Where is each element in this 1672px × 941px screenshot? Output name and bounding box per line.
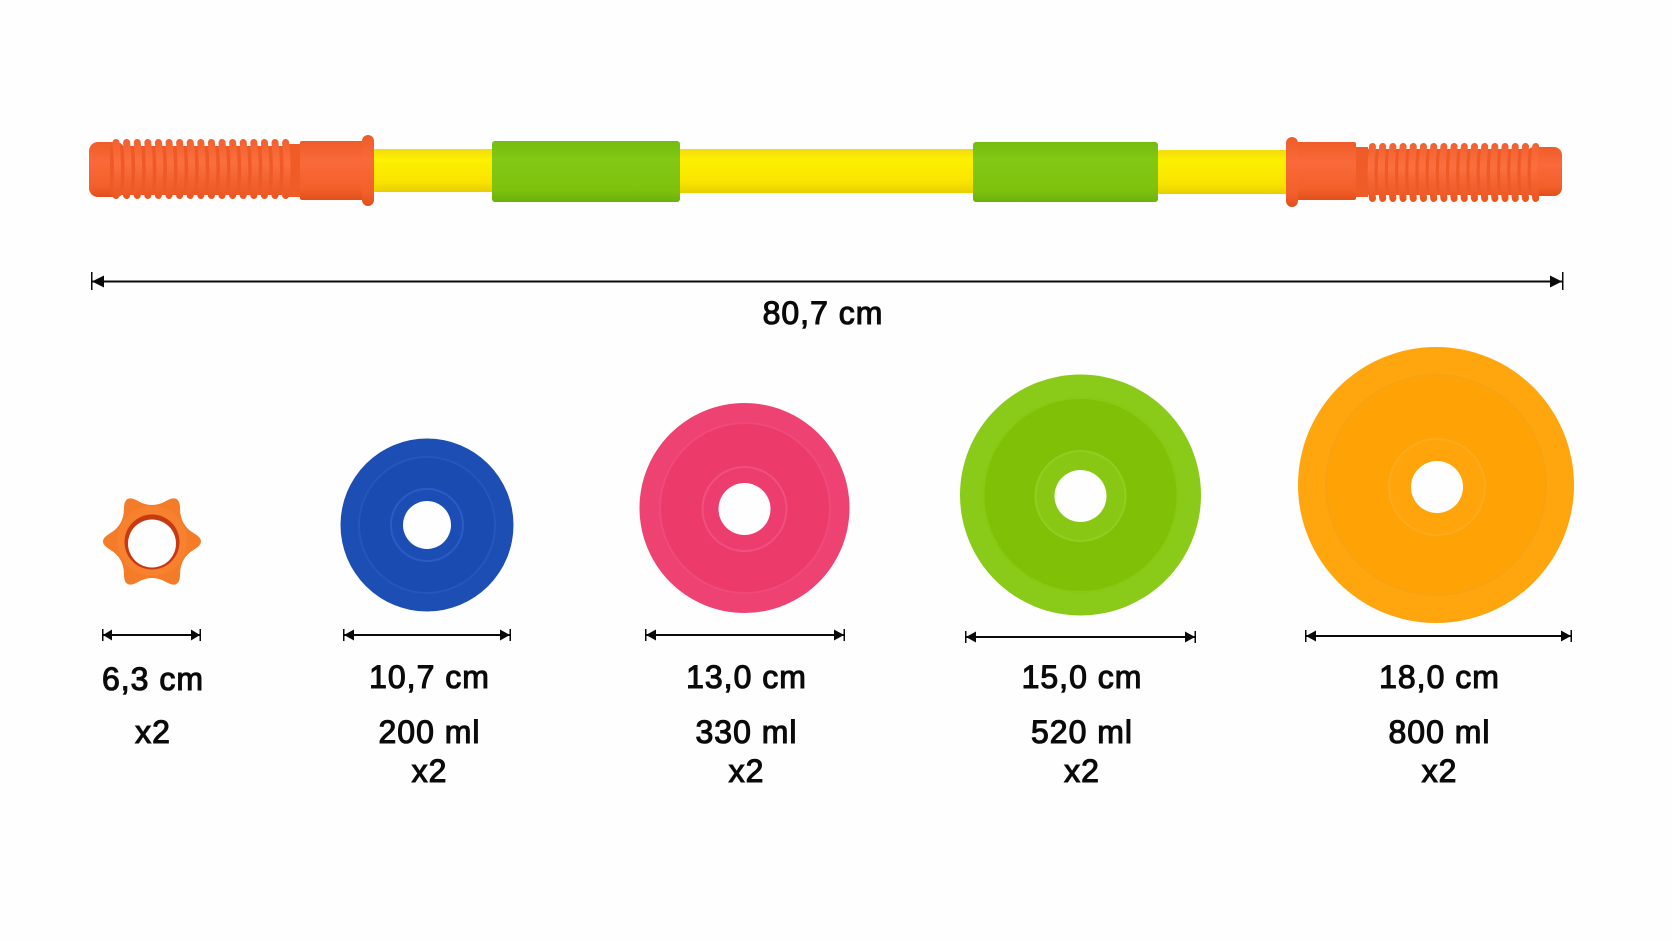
barbell bar xyxy=(89,135,1562,207)
orange collar nut xyxy=(103,498,201,585)
green plate labels: 15,0 cm xyxy=(1022,659,1142,695)
orange plate labels: 18,0 cm xyxy=(1379,659,1500,695)
pink plate labels: x2 xyxy=(729,753,764,789)
pink plate 330 ml xyxy=(640,403,850,613)
orange plate 800 ml xyxy=(1298,347,1574,623)
blue plate dimension arrow xyxy=(343,629,511,641)
pink plate labels: 13,0 cm xyxy=(686,659,807,695)
green plate dimension arrow xyxy=(965,631,1196,643)
blue plate labels: 200 ml xyxy=(378,714,481,750)
pink plate labels xyxy=(686,659,807,789)
blue plate labels xyxy=(369,659,490,789)
bar length dimension arrow xyxy=(91,272,1564,290)
green plate labels: 520 ml xyxy=(1031,714,1133,750)
bar length label: 80,7 cm xyxy=(763,295,883,331)
orange plate labels: x2 xyxy=(1422,753,1457,789)
pink plate dimension arrow xyxy=(645,629,845,641)
nut labels xyxy=(102,661,204,750)
nut labels: x2 xyxy=(135,714,171,750)
green plate labels: x2 xyxy=(1064,753,1100,789)
nut dimension arrow xyxy=(102,629,201,641)
nut labels: 6,3 cm xyxy=(102,661,204,697)
orange plate labels: 800 ml xyxy=(1388,714,1491,750)
middle yellow bar segment xyxy=(678,149,975,193)
green plate labels xyxy=(1022,659,1142,789)
left threaded orange end xyxy=(89,135,374,206)
blue plate 200 ml xyxy=(340,438,514,612)
blue plate labels: x2 xyxy=(412,753,447,789)
orange plate labels xyxy=(1379,659,1500,789)
right yellow bar segment xyxy=(1156,150,1292,194)
left yellow bar segment xyxy=(368,149,495,192)
right green foam grip xyxy=(973,142,1158,202)
blue plate labels: 10,7 cm xyxy=(369,659,490,695)
right threaded orange end xyxy=(1286,137,1562,207)
pink plate labels: 330 ml xyxy=(695,714,798,750)
orange plate dimension arrow xyxy=(1305,630,1572,642)
left green foam grip xyxy=(492,141,680,202)
green plate 520 ml xyxy=(960,374,1201,616)
